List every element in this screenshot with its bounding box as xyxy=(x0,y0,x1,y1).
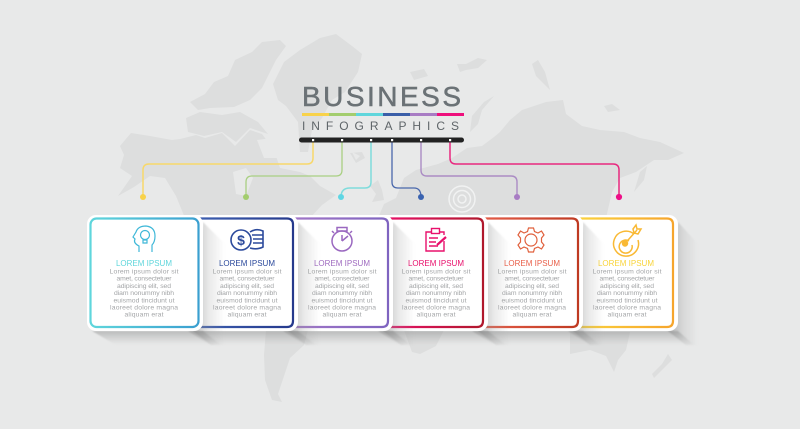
icon: head with lightbulb xyxy=(133,226,155,252)
icon: gear xyxy=(518,228,544,252)
heading: LOREM IPSUM xyxy=(219,259,275,268)
body text xyxy=(110,268,179,319)
panel: card 6 yellow xyxy=(565,215,698,345)
body text: amet, consectetuer xyxy=(220,276,275,283)
body text: euismod tincidunt ut xyxy=(312,297,373,304)
body text: Lorem ipsum dolor sit xyxy=(308,268,377,276)
map: bays and lakes xyxy=(233,138,360,196)
title: BUSINESS: BUSINESS xyxy=(302,81,461,112)
body text: amet, consectetuer xyxy=(314,276,370,283)
body text: aliquam erat xyxy=(608,312,647,319)
body text: laoreet dolore magna xyxy=(402,304,470,312)
watermark spiral xyxy=(449,186,475,212)
body text: adipiscing elit, sed xyxy=(600,283,654,290)
body text: laoreet dolore magna xyxy=(213,304,281,312)
panel: card 4 crimson xyxy=(375,215,510,345)
body text: amet, consectetuer xyxy=(408,276,464,283)
body text: diam nonummy nibh xyxy=(114,290,174,297)
body text: euismod tincidunt ut xyxy=(114,297,175,304)
body text: diam nonummy nibh xyxy=(312,290,372,297)
heading: LOREM IPSUM xyxy=(408,259,464,268)
colour strip under title xyxy=(302,113,464,116)
body text: amet, consectetuer xyxy=(600,276,655,283)
heading: LOREM IPSUM xyxy=(314,259,370,268)
body text: aliquam erat xyxy=(512,312,552,319)
body text: Lorem ipsum dolor sit xyxy=(592,268,662,276)
world map xyxy=(118,34,684,402)
body text: laoreet dolore magna xyxy=(110,304,178,312)
body text: euismod tincidunt ut xyxy=(596,297,658,304)
body text: amet, consectetuer xyxy=(504,276,560,283)
heading: LOREM IPSUM xyxy=(504,259,560,268)
body text: aliquam erat xyxy=(228,312,267,319)
icon: stopwatch xyxy=(332,228,352,251)
connector: purple xyxy=(421,140,520,200)
heading: LOREM IPSUM xyxy=(116,259,172,268)
body text xyxy=(592,268,662,319)
connector: yellow xyxy=(140,140,313,200)
icon: dollar coins: $ xyxy=(237,232,245,248)
body text: aliquam erat xyxy=(416,312,456,319)
heading: LOREM IPSUM xyxy=(598,259,654,268)
icon: target with arrow xyxy=(614,225,641,256)
body text: adipiscing elit, sed xyxy=(117,283,171,290)
body text: laoreet dolore magna xyxy=(308,304,376,312)
body text: amet, consectetuer xyxy=(116,276,172,283)
panel: card 1 cyan xyxy=(87,215,225,345)
black connector bar xyxy=(299,138,464,142)
body text: laoreet dolore magna xyxy=(498,304,566,312)
body text: aliquam erat xyxy=(124,312,164,319)
body text xyxy=(402,268,471,319)
connector: green xyxy=(243,140,342,200)
body text: euismod tincidunt ut xyxy=(406,297,467,304)
body text xyxy=(308,268,377,319)
body text: laoreet dolore magna xyxy=(593,304,661,312)
body text: diam nonummy nibh xyxy=(217,290,277,297)
body text: Lorem ipsum dolor sit xyxy=(212,268,282,276)
body text: euismod tincidunt ut xyxy=(216,297,278,304)
body text: adipiscing elit, sed xyxy=(220,283,274,290)
body text xyxy=(212,268,282,319)
body text: diam nonummy nibh xyxy=(597,290,657,297)
panel: card 3 purple xyxy=(280,215,415,345)
icon: clipboard xyxy=(426,228,446,251)
body text: euismod tincidunt ut xyxy=(502,297,563,304)
body text: adipiscing elit, sed xyxy=(409,283,463,290)
body text: aliquam erat xyxy=(322,312,362,319)
connector: blue xyxy=(392,140,424,200)
body text: Lorem ipsum dolor sit xyxy=(402,268,471,276)
panel: card 2 navy xyxy=(185,215,320,345)
body text: diam nonummy nibh xyxy=(406,290,466,297)
connector: pink xyxy=(450,140,622,200)
body text xyxy=(498,268,567,319)
subtitle: INFOGRAPHICS: INFOGRAPHICS xyxy=(302,119,459,133)
body text: diam nonummy nibh xyxy=(502,290,562,297)
body text: Lorem ipsum dolor sit xyxy=(110,268,179,276)
connector: cyan xyxy=(338,140,371,200)
panel: card 5 red xyxy=(470,215,604,345)
body text: Lorem ipsum dolor sit xyxy=(498,268,567,276)
body text: adipiscing elit, sed xyxy=(315,283,369,290)
body text: adipiscing elit, sed xyxy=(505,283,559,290)
